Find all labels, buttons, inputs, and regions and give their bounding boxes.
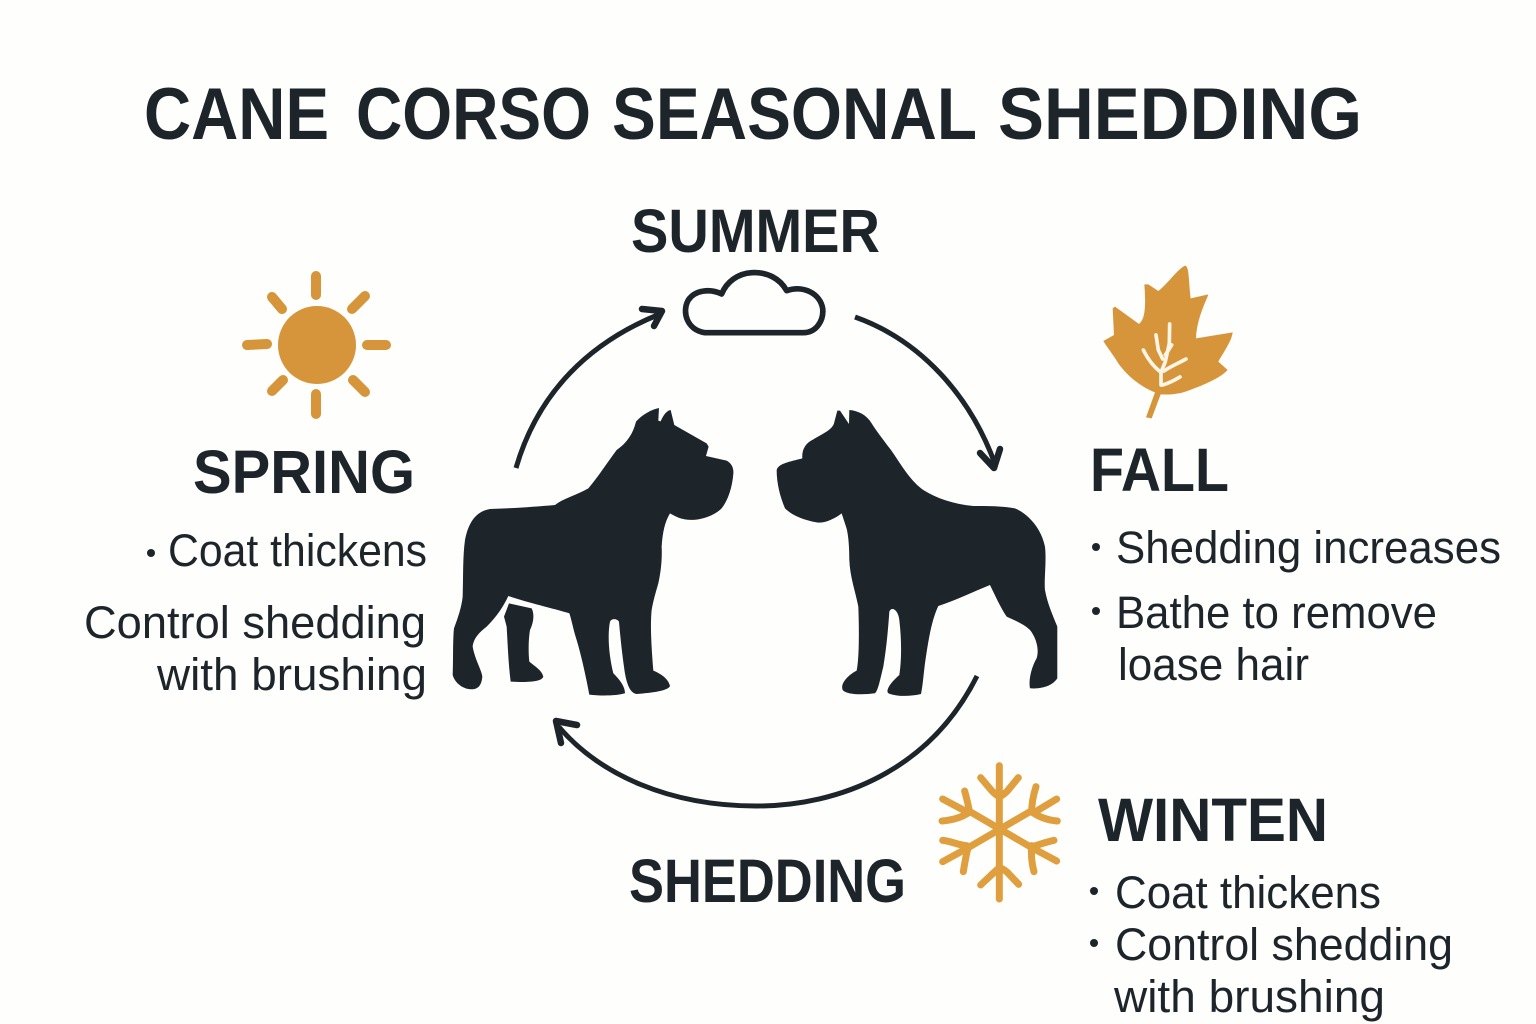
heading: fall: FALL: [1090, 436, 1229, 504]
icon: sun: [247, 276, 386, 414]
title: CANE: [144, 74, 329, 155]
text: spring list: [84, 525, 427, 700]
heading: spring: SPRING: [193, 438, 415, 506]
text: spring list: with brushing: [156, 649, 427, 700]
text: fall list: loase hair: [1118, 639, 1309, 690]
text: winter list: Coat thickens: [1115, 867, 1381, 918]
text: spring list: Coat thickens: [168, 525, 427, 576]
arrow: spring to summer: [516, 309, 662, 468]
dog silhouette: left: [453, 408, 733, 696]
title: CORSO: [356, 74, 591, 155]
heading: winter: WINTEN: [1098, 786, 1328, 854]
heading: summer: SUMMER: [631, 197, 880, 265]
text: winter list: [1090, 867, 1453, 1022]
arrow: winter to spring: [556, 676, 977, 806]
dog silhouette: right: [777, 410, 1057, 696]
text: fall list: Shedding increases: [1116, 522, 1501, 573]
text: winter list: with brushing: [1113, 971, 1385, 1022]
text: fall list: [1092, 522, 1501, 690]
title: SEASONAL: [612, 74, 977, 155]
icon: snowflake: [942, 766, 1057, 899]
text: spring list: Control shedding: [84, 597, 426, 648]
icon: cloud: [686, 273, 823, 333]
title: [144, 74, 1362, 155]
text: winter list: Control shedding: [1115, 919, 1453, 970]
arrow: summer to fall: [855, 317, 1000, 468]
text: fall list: Bathe to remove: [1116, 587, 1437, 638]
icon: maple leaf: [1103, 266, 1233, 418]
heading: shedding: SHEDDING: [629, 847, 906, 915]
title: SHEDDING: [998, 74, 1362, 155]
